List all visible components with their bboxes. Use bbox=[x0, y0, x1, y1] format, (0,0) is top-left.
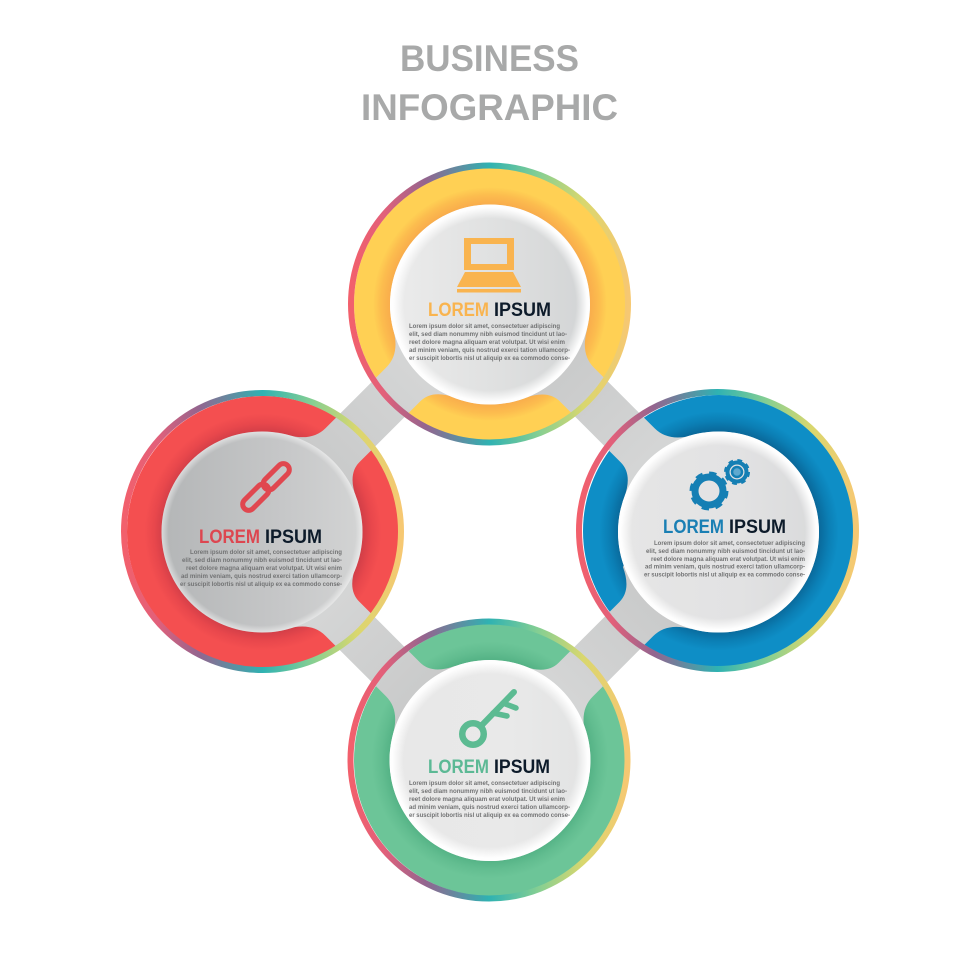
gradient ring bbox=[350, 622, 628, 898]
panel: top yellow circle bbox=[351, 166, 628, 442]
heading: LOREM bbox=[199, 526, 260, 548]
panel: left red circle bbox=[124, 393, 401, 670]
body text: elit, sed diam nonummy nibh euismod tincidunt ut lao- bbox=[182, 557, 342, 564]
title bbox=[361, 38, 618, 128]
body text bbox=[644, 540, 805, 578]
centre disc bbox=[162, 432, 362, 632]
gradient ring bbox=[579, 392, 856, 669]
body text: er suscipit lobortis nisl ut aliquip ex ea commodo conse- bbox=[409, 812, 570, 819]
coloured discs bbox=[127, 168, 855, 896]
connector: right to top bbox=[517, 326, 697, 505]
gradient ring bbox=[124, 393, 401, 670]
heading: IPSUM bbox=[494, 756, 550, 778]
panel: right blue circle bbox=[579, 392, 856, 669]
heading: IPSUM bbox=[265, 526, 322, 548]
body text: reet dolore magna aliquam erat volutpat. Ut wisi enim bbox=[409, 796, 565, 803]
icon: laptop bbox=[457, 238, 521, 292]
heading: LOREM bbox=[663, 516, 724, 538]
body text: Lorem ipsum dolor sit amet, consectetuer adipiscing bbox=[409, 323, 560, 330]
body text bbox=[180, 549, 342, 588]
body text: reet dolore magna aliquam erat volutpat. Ut wisi enim bbox=[409, 339, 565, 346]
body text: reet dolore magna aliquam erat volutpat. Ut wisi enim bbox=[651, 556, 805, 563]
icon: chain link bbox=[240, 461, 292, 513]
connector: bottom to right bbox=[516, 559, 695, 739]
body text: er suscipit lobortis nisl ut aliquip ex ea commodo conse- bbox=[409, 355, 570, 362]
body text: ad minim veniam, quis nostrud exerci tation ullamcorp- bbox=[409, 804, 570, 811]
body text: er suscipit lobortis nisl ut aliquip ex ea commodo conse- bbox=[644, 572, 805, 578]
title: INFOGRAPHIC bbox=[361, 87, 618, 128]
centre disc bbox=[390, 660, 590, 861]
heading: LOREM bbox=[428, 756, 489, 778]
body text: reet dolore magna aliquam erat volutpat. Ut wisi enim bbox=[186, 565, 342, 572]
body text: elit, sed diam nonummy nibh euismod tincidunt ut lao- bbox=[409, 788, 567, 795]
body text: er suscipit lobortis nisl ut aliquip ex ea commodo conse- bbox=[180, 581, 342, 588]
body text: elit, sed diam nonummy nibh euismod tincidunt ut lao- bbox=[646, 548, 805, 555]
body text: Lorem ipsum dolor sit amet, consectetuer adipiscing bbox=[190, 549, 342, 556]
panel: bottom green circle bbox=[350, 622, 628, 898]
body text bbox=[409, 323, 570, 362]
gradient ring bbox=[351, 166, 628, 442]
heading bbox=[428, 756, 550, 778]
centre disc bbox=[618, 432, 819, 632]
icon: gears bbox=[692, 461, 748, 508]
body text: Lorem ipsum dolor sit amet, consectetuer adipiscing bbox=[654, 540, 805, 547]
body text: ad minim veniam, quis nostrud exerci tation ullamcorp- bbox=[409, 347, 570, 354]
connector: left to bottom bbox=[283, 559, 463, 738]
centre disc bbox=[390, 204, 590, 404]
heading bbox=[199, 526, 322, 548]
heading bbox=[663, 516, 786, 538]
icon: key bbox=[462, 692, 516, 745]
title: BUSINESS bbox=[400, 38, 579, 79]
body text: ad minim veniam, quis nostrud exerci tation ullamcorp- bbox=[645, 564, 805, 570]
heading bbox=[428, 299, 551, 321]
heading: IPSUM bbox=[729, 516, 786, 538]
heading: LOREM bbox=[428, 299, 489, 321]
heading: IPSUM bbox=[494, 299, 551, 321]
body text: ad minim veniam, quis nostrud exerci tation ullamcorp- bbox=[181, 573, 342, 580]
body text bbox=[409, 780, 570, 819]
body text: Lorem ipsum dolor sit amet, consectetuer adipiscing bbox=[409, 780, 560, 787]
connector: top to left bbox=[284, 325, 463, 505]
body text: elit, sed diam nonummy nibh euismod tincidunt ut lao- bbox=[409, 331, 567, 338]
